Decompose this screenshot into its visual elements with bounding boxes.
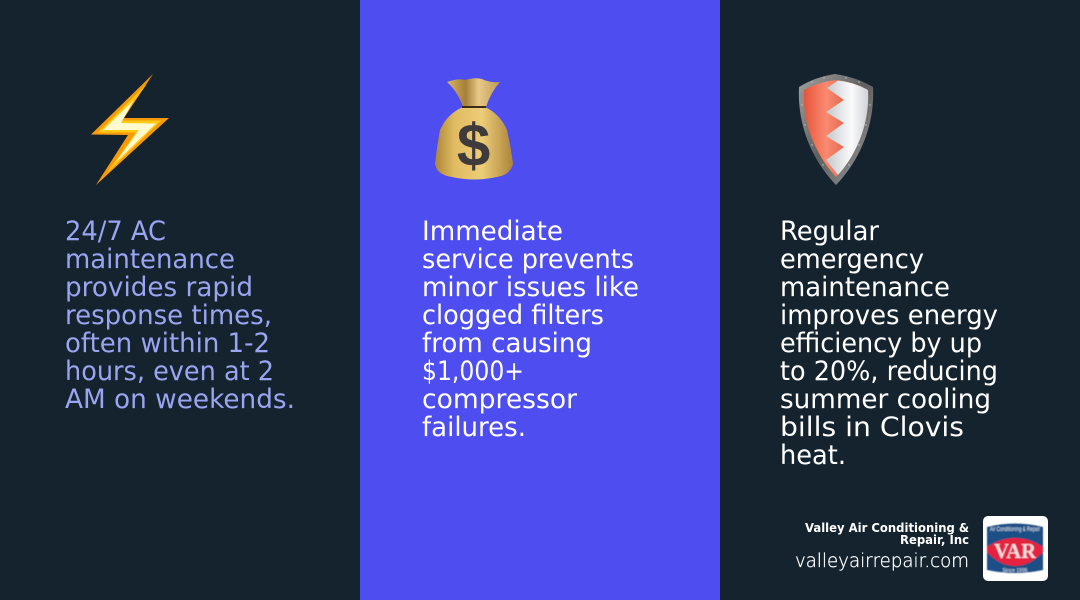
text: rapid response times: provides rapid bbox=[65, 272, 253, 303]
text: cost prevention: failures. bbox=[422, 412, 526, 443]
website url: valleyairrepair.com bbox=[795, 551, 969, 572]
text: cost prevention: minor issues like bbox=[422, 272, 639, 303]
text: rapid response times: often within 1-2 bbox=[65, 328, 270, 359]
text: cost prevention: compressor bbox=[422, 384, 578, 415]
text: energy efficiency: maintenance bbox=[780, 272, 950, 303]
text: energy efficiency: efficiency by up bbox=[780, 328, 982, 359]
text: cost prevention: service prevents bbox=[422, 244, 634, 275]
text: cost prevention: $1,000+ bbox=[422, 356, 524, 387]
text: energy efficiency: improves energy bbox=[780, 300, 998, 331]
company name: Repair, Inc bbox=[900, 532, 969, 547]
text: energy efficiency: bills in Clovis bbox=[780, 412, 964, 443]
text: cost prevention: Immediate bbox=[422, 216, 563, 247]
dollar sign: $ bbox=[457, 112, 490, 179]
text: rapid response times: hours, even at 2 bbox=[65, 356, 274, 387]
company name bbox=[805, 520, 969, 547]
text: rapid response times: AM on weekends. bbox=[65, 384, 295, 415]
logo: VAR bbox=[994, 539, 1037, 563]
panel: cost prevention bbox=[360, 0, 720, 600]
text: energy efficiency: Regular bbox=[780, 216, 880, 247]
icon: shield bbox=[799, 74, 873, 185]
panel: energy efficiency bbox=[720, 0, 1080, 600]
logo: Since 1995 bbox=[1002, 568, 1028, 574]
panel: rapid response bbox=[0, 0, 360, 600]
text: rapid response times: 24/7 AC bbox=[65, 216, 166, 247]
text: energy efficiency: emergency bbox=[780, 244, 924, 275]
icon: money bag bbox=[435, 78, 513, 180]
text: energy efficiency: heat. bbox=[780, 440, 846, 471]
text: energy efficiency: summer cooling bbox=[780, 384, 991, 415]
text: rapid response times: response times, bbox=[65, 300, 272, 331]
logo bbox=[983, 516, 1048, 581]
text: rapid response times bbox=[65, 216, 295, 415]
logo: Air Conditioning & Repair bbox=[990, 527, 1040, 533]
text: cost prevention bbox=[422, 216, 639, 443]
text: energy efficiency: to 20%, reducing bbox=[780, 356, 998, 387]
text: cost prevention: from causing bbox=[422, 328, 592, 359]
footer: company branding bbox=[795, 516, 1048, 581]
text: cost prevention: clogged filters bbox=[422, 300, 604, 331]
rivets bbox=[801, 77, 871, 166]
text: energy efficiency bbox=[780, 216, 998, 471]
icon: lightning bolt bbox=[91, 74, 169, 185]
text: rapid response times: maintenance bbox=[65, 244, 235, 275]
company name: Valley Air Conditioning & bbox=[805, 520, 969, 535]
